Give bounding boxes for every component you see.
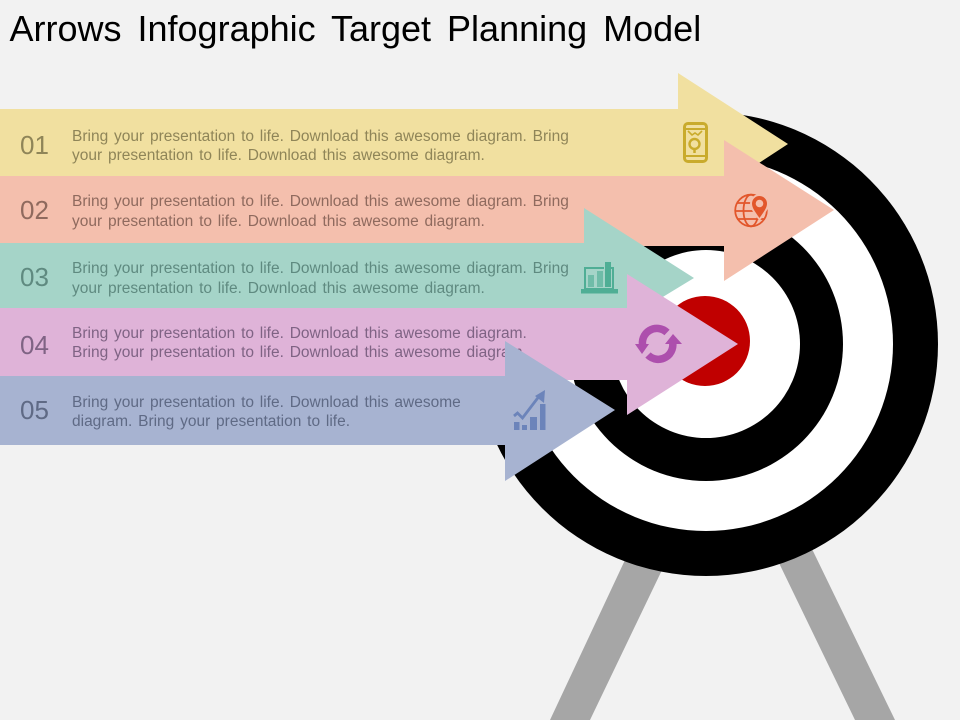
arrow 03 xyxy=(0,208,694,345)
arrow 03: 03 xyxy=(20,262,49,292)
icon: growth chart xyxy=(514,390,546,430)
arrow 05 xyxy=(0,341,615,481)
arrow 04 xyxy=(0,274,738,415)
arrow 05: Bring your presentation to life. Download this awesome xyxy=(72,394,461,411)
target stand legs xyxy=(550,549,895,720)
arrow 04: Bring your presentation to life. Download this awesome diagram. xyxy=(72,344,527,361)
arrow 02: Bring your presentation to life. Download this awesome diagram. Bring xyxy=(72,193,569,210)
arrow 01 xyxy=(0,73,788,216)
target xyxy=(474,112,938,576)
arrow 01: 01 xyxy=(20,130,49,160)
icon: phone with location pin xyxy=(684,124,706,162)
arrow 03: your presentation to life. Download this awesome diagram. xyxy=(72,280,485,297)
arrow 04: Bring your presentation to life. Download this awesome diagram. xyxy=(72,325,527,342)
arrow 05: diagram. Bring your presentation to life. xyxy=(72,413,350,430)
arrow 01: Bring your presentation to life. Download this awesome diagram. Bring xyxy=(72,128,569,145)
icon: refresh arrows xyxy=(635,328,682,359)
icon: laptop with bars xyxy=(581,262,618,294)
title: Arrows Infographic Target Planning Model xyxy=(10,8,701,49)
icon: globe with pin xyxy=(735,194,769,226)
arrow 03: Bring your presentation to life. Download this awesome diagram. Bring xyxy=(72,260,569,277)
arrow 02: 02 xyxy=(20,195,49,225)
arrow 02: your presentation to life. Download this awesome diagram. xyxy=(72,213,485,230)
arrow 02 xyxy=(0,140,834,281)
arrow 05: 05 xyxy=(20,395,49,425)
arrow 04: 04 xyxy=(20,330,49,360)
arrow 01: your presentation to life. Download this awesome diagram. xyxy=(72,147,485,164)
